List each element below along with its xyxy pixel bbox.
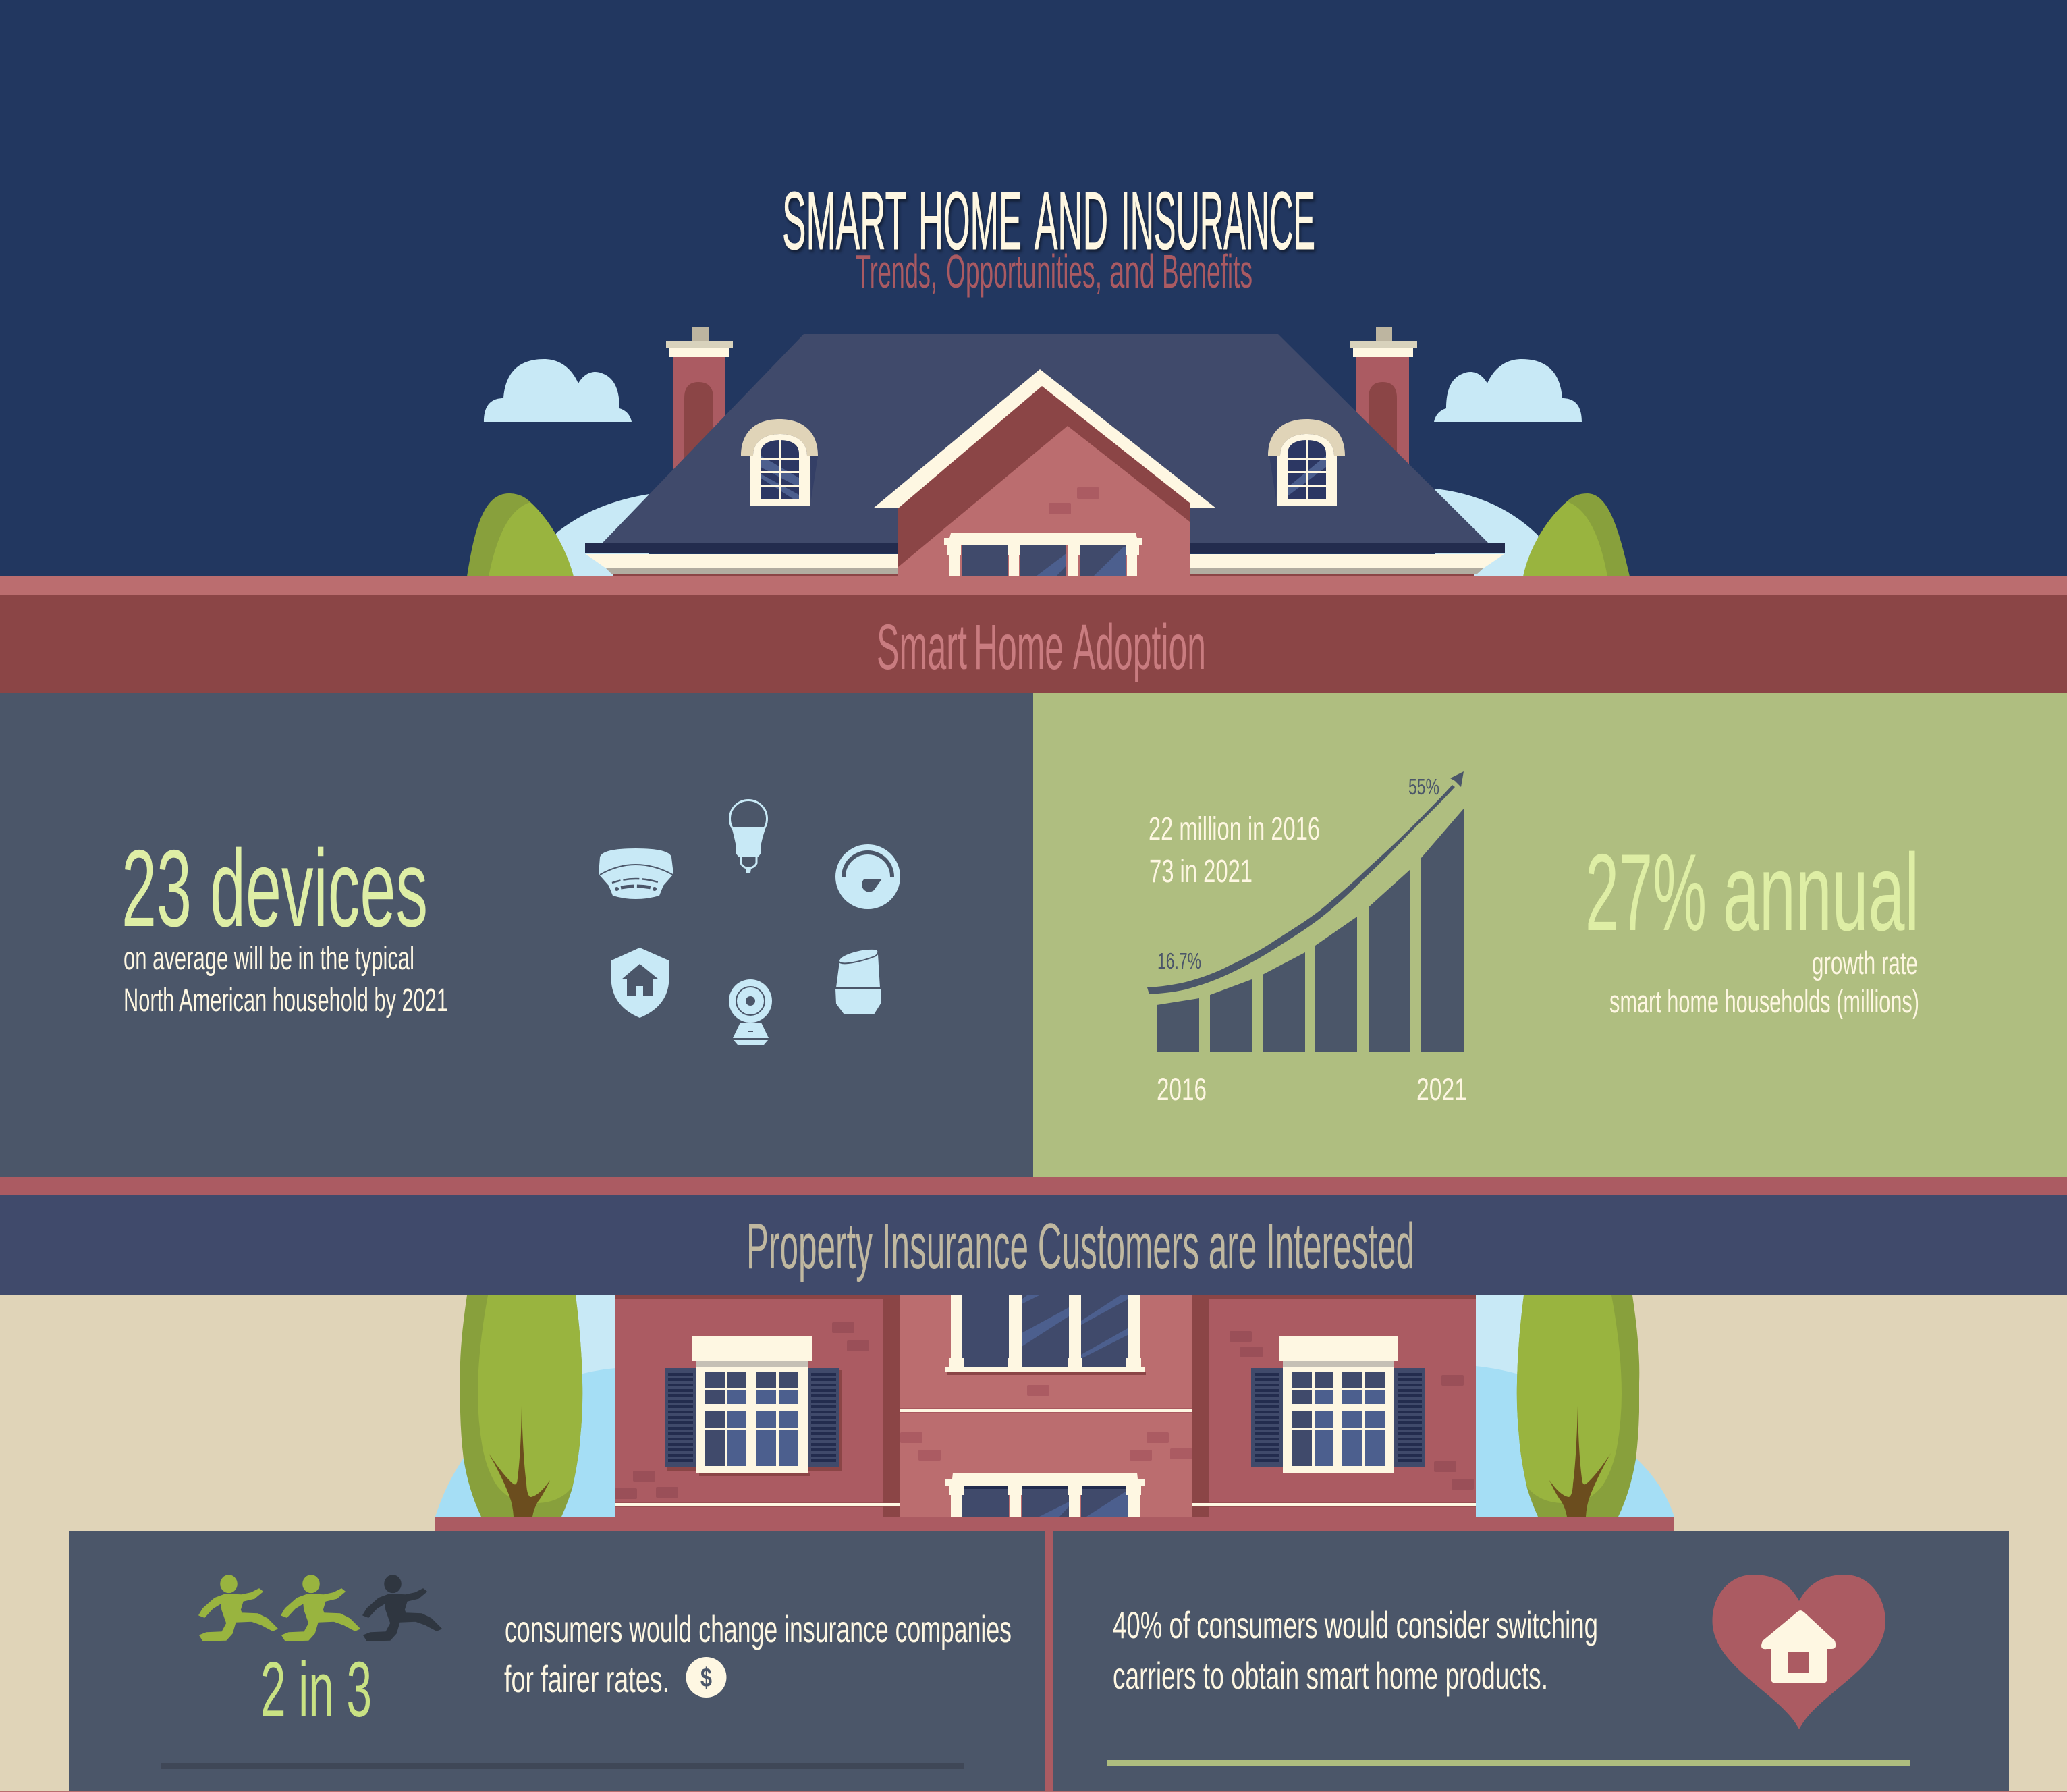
- text: consumers: for fairer rates.: [504, 1658, 669, 1700]
- section band: property insurance: [0, 1195, 2067, 1295]
- icon: security shield: [611, 948, 669, 1018]
- illustration: house front: [435, 1295, 1674, 1531]
- section band: smart home adoption: [0, 595, 2067, 693]
- left tree front: [460, 1295, 582, 1517]
- devices headline: 23: [121, 827, 192, 950]
- subtitle: Benefits: [1162, 245, 1252, 298]
- eaves: [585, 543, 1505, 576]
- panel: bottom right: [1053, 1531, 2009, 1791]
- panel: growth: [1033, 693, 2067, 1177]
- ground band top: [0, 576, 2067, 595]
- growth arrow: [1147, 771, 1464, 994]
- icon: smart speaker: [835, 949, 881, 1014]
- porch window top: [944, 533, 1142, 576]
- growth headline: [1585, 832, 1919, 954]
- roof: [603, 334, 1488, 543]
- icon: thermostat dial: [835, 844, 900, 909]
- section heading: smart home adoption: [877, 612, 1206, 683]
- left tree: [467, 493, 574, 576]
- right chimney: [1350, 327, 1417, 472]
- households text: 22 million in 2016: [1149, 811, 1320, 847]
- text: INSURANCE: [1121, 175, 1315, 267]
- illustration: house roof scene: [467, 327, 1630, 576]
- center bricks: [900, 1385, 1192, 1461]
- devices description: on average will be in the typical: [123, 941, 414, 977]
- households text: 73 in 2021: [1149, 854, 1252, 890]
- icon: smoke detector: [599, 848, 673, 899]
- bricks: [615, 1322, 1474, 1499]
- right window with shutters: [1251, 1336, 1425, 1473]
- subtitle: Opportunities,: [946, 245, 1102, 298]
- growth description: [1609, 945, 1919, 1019]
- gable front: [873, 369, 1216, 576]
- underline left: [161, 1763, 964, 1769]
- label: 55 percent: 55%: [1408, 774, 1439, 799]
- devices headline: [121, 827, 428, 950]
- right tree front: [1517, 1295, 1639, 1517]
- title: [782, 175, 1315, 267]
- households text: [1149, 811, 1320, 890]
- axis labels: 2016: [1157, 1071, 1207, 1107]
- text: consumers: [504, 1608, 1012, 1700]
- panel: bottom left: [69, 1531, 1045, 1791]
- section heading: property insurance: Property Insurance Customers are Interested: [746, 1210, 1414, 1282]
- lower center door window: [945, 1473, 1145, 1517]
- axis labels: [1157, 1071, 1467, 1107]
- section heading: smart home adoption: Smart: [877, 612, 967, 683]
- right dormer window: [1268, 419, 1345, 506]
- stat: 2 in 3: 2 in 3: [260, 1646, 372, 1733]
- section heading: smart home adoption: Home: [974, 612, 1064, 683]
- axis labels: 2021: [1416, 1071, 1467, 1107]
- subtitle: and: [1109, 245, 1155, 298]
- left cloud: [484, 359, 632, 422]
- growth headline: 27%: [1585, 832, 1707, 954]
- growth headline: annual: [1723, 832, 1919, 954]
- label: 16.7 percent: 16.7%: [1157, 948, 1201, 973]
- background beige: [0, 1295, 2067, 1792]
- icon: light bulb: [730, 800, 767, 873]
- devices description: [123, 941, 448, 1019]
- icon: running people: [199, 1575, 441, 1641]
- bar chart: [1157, 809, 1464, 1052]
- icon: camera: [729, 979, 772, 1045]
- panel divider: [1045, 1531, 1053, 1792]
- walls: [615, 1295, 1476, 1517]
- devices headline: devices: [210, 827, 428, 950]
- text: 40 percent: 40% of consumers would consider switching: [1113, 1604, 1598, 1646]
- sky behind house: [435, 1295, 1674, 1517]
- right tree: [1523, 493, 1630, 576]
- text: 40 percent: carriers to obtain smart home products.: [1113, 1654, 1548, 1697]
- title: AND: [1035, 175, 1108, 267]
- text: 40 percent: [1113, 1604, 1598, 1697]
- icon: dollar coin: $: [700, 1663, 712, 1693]
- subtitle: Trends,: [856, 245, 937, 298]
- title: SMART: [782, 175, 907, 267]
- left window with shutters: [665, 1336, 842, 1476]
- left dormer window: [741, 419, 818, 506]
- icon: dollar coin: [686, 1657, 726, 1698]
- panel: devices: [0, 693, 1033, 1177]
- right cloud: [1434, 359, 1582, 422]
- icon: heart with house: [1712, 1575, 1885, 1729]
- sky hills behind house: [533, 489, 1552, 576]
- divider band: [0, 1177, 2067, 1195]
- underline right: [1107, 1760, 1910, 1766]
- section heading: smart home adoption: Adoption: [1073, 612, 1206, 683]
- growth description: growth rate: [1812, 945, 1918, 981]
- upper center window: [945, 1295, 1146, 1375]
- text: consumers: consumers would change insurance companies: [505, 1608, 1012, 1650]
- devices description: North American household by 2021: [123, 983, 448, 1019]
- left chimney: [666, 327, 733, 472]
- ground strip: [435, 1517, 1674, 1531]
- title: HOME: [918, 175, 1022, 267]
